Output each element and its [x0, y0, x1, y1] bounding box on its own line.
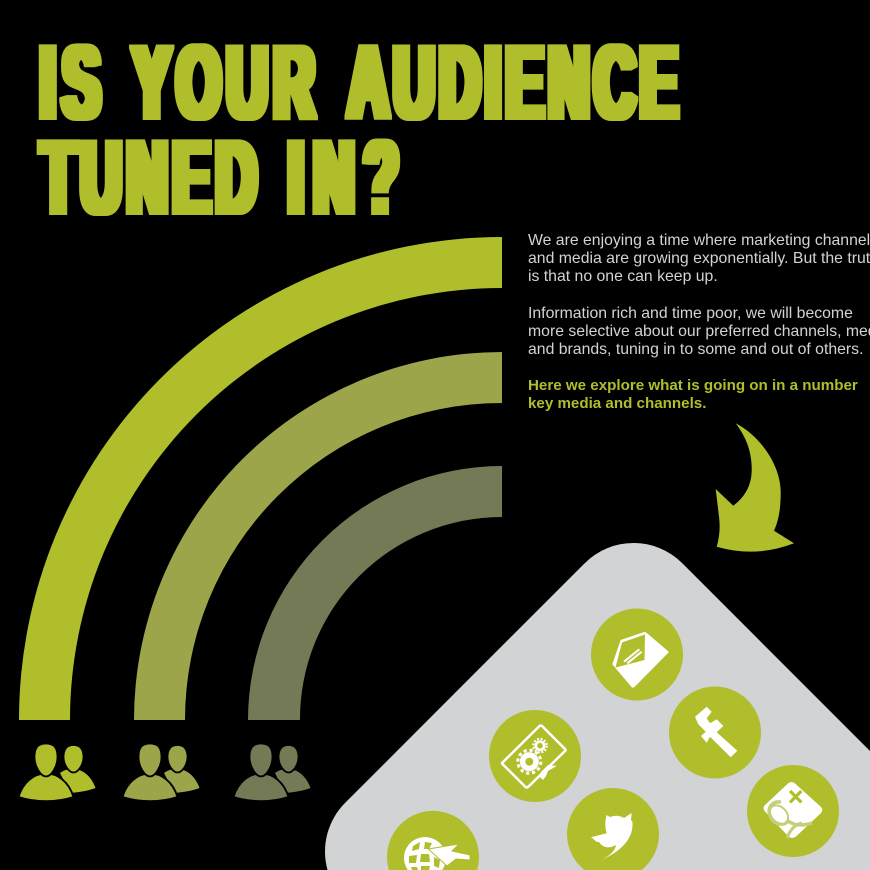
title: AUDIENCE — [348, 23, 683, 140]
intro paragraph 2: and brands, tuning in to some and out of others. — [528, 340, 863, 358]
title: IN? — [288, 118, 408, 235]
signal arc: middle — [134, 352, 502, 720]
signal arc: inner — [248, 466, 502, 720]
intro paragraph 1 — [528, 232, 870, 285]
title: IS — [40, 23, 107, 140]
icon: people outer — [18, 744, 96, 801]
title: TUNED — [41, 118, 262, 235]
grey panel — [325, 543, 870, 870]
intro paragraph 1: is that no one can keep up. — [528, 268, 718, 285]
icon: twitter — [567, 788, 659, 870]
icon: settings screen — [489, 710, 581, 802]
highlighted intro text: key media and channels. — [528, 395, 706, 412]
icon: globe cursor — [387, 811, 479, 870]
intro paragraph 2: Information rich and time poor, we will become — [528, 304, 853, 322]
title — [40, 23, 683, 235]
icon: people inner — [234, 744, 310, 801]
highlighted intro text: Here we explore what is going on in a number — [528, 377, 858, 394]
icon: people middle — [122, 744, 200, 801]
signal arc: outer — [19, 237, 502, 720]
title: YOUR — [133, 23, 321, 140]
icon: google plus — [747, 765, 839, 857]
intro paragraph 2 — [528, 304, 870, 358]
icon: email — [591, 608, 683, 700]
highlighted intro text — [528, 377, 858, 412]
intro paragraph 1: and media are growing exponentially. But the truth — [528, 250, 870, 267]
icon: facebook — [669, 686, 761, 778]
arrow — [716, 423, 794, 552]
intro paragraph 1: We are enjoying a time where marketing channels — [528, 232, 870, 249]
